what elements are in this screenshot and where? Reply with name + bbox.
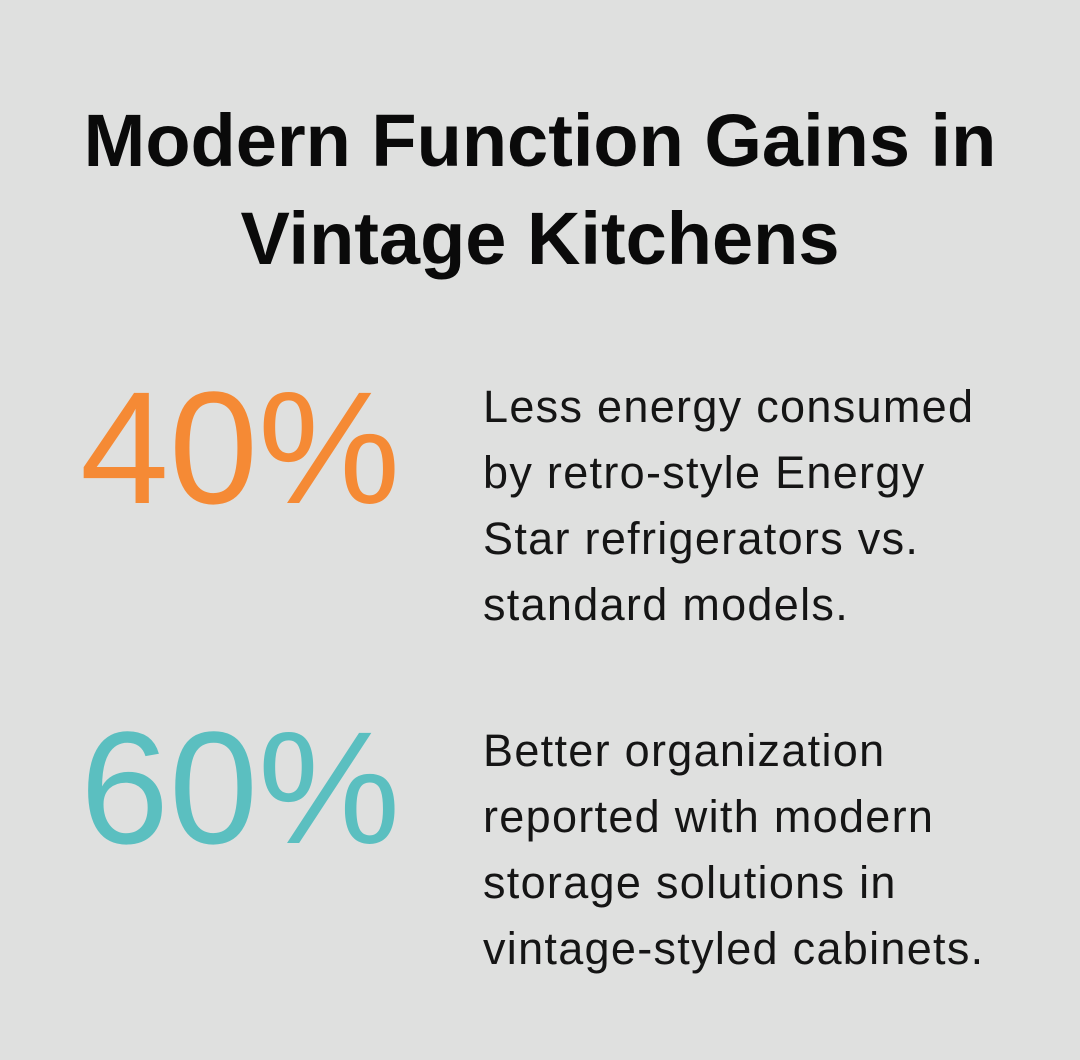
text: organization: reported with modern [483, 791, 934, 842]
title [84, 99, 996, 280]
text: organization: Better organization [483, 725, 885, 776]
stat: 40%: 40% [80, 358, 400, 537]
text: energy [483, 381, 974, 630]
text: organization [483, 725, 984, 974]
text: energy: standard models. [483, 579, 849, 630]
text: energy: Star refrigerators vs. [483, 513, 919, 564]
title: Modern Function Gains in [84, 99, 996, 182]
text: organization: vintage-styled cabinets. [483, 923, 984, 974]
stat: 60%: 60% [80, 698, 400, 877]
text: energy: Less energy consumed [483, 381, 974, 432]
title: Vintage Kitchens [240, 197, 840, 280]
text: organization: storage solutions in [483, 857, 897, 908]
text: energy: by retro-style Energy [483, 447, 925, 498]
